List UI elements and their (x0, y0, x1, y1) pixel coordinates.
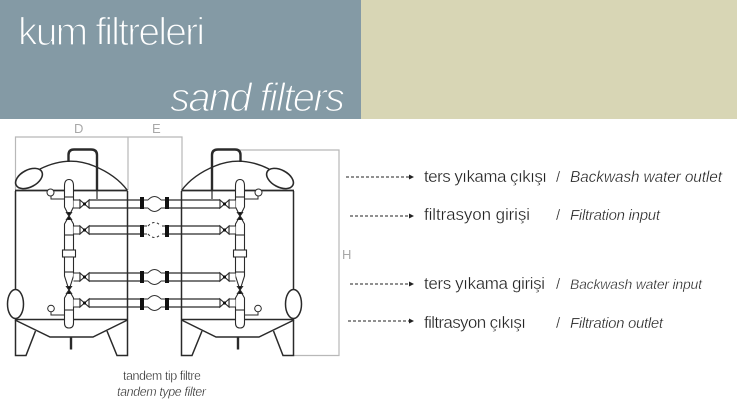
caption: tandem type filter: tandem tip filtre (123, 369, 201, 383)
callout: backwash water input: ters yıkama girişi (424, 274, 545, 293)
beige header panel (361, 0, 737, 119)
pipe couplings (148, 196, 161, 310)
subtitle: sand filters: sand filters (170, 76, 345, 120)
caption: tandem type filter (117, 369, 207, 399)
callout: filtration outlet: / (556, 315, 561, 332)
callout: filtration outlet: filtrasyon çıkışı (424, 313, 526, 332)
callout: backwash water outlet: / (556, 169, 561, 186)
dimension lines and labels (16, 121, 351, 356)
callout: backwash water outlet: Backwash water outlet (570, 169, 723, 186)
dimension lines and labels: E (152, 121, 161, 136)
callout: filtration outlet (348, 313, 664, 332)
callout: filtration outlet: Filtration outlet (570, 315, 664, 332)
diagram: left filter tank (8, 150, 148, 356)
dimension lines and labels: H (342, 247, 351, 262)
callout: backwash water input: Backwash water input (570, 276, 703, 292)
dimension lines and labels: D (74, 121, 83, 136)
diagram: right filter tank (161, 150, 302, 356)
callout: backwash water input: / (556, 276, 561, 293)
callout: filtration input: filtrasyon girişi (424, 205, 530, 224)
header panel: kum filtreleri (0, 0, 361, 120)
callout: filtration input (350, 205, 661, 224)
caption: tandem type filter: tandem type filter (117, 385, 207, 399)
callout: backwash water outlet: ters yıkama çıkışı (424, 167, 547, 186)
callout: backwash water outlet (346, 167, 723, 186)
callout: filtration input: / (556, 207, 561, 224)
callout: filtration input: Filtration input (570, 207, 661, 224)
callout: backwash water input (350, 274, 703, 293)
title: kum filtreleri: kum filtreleri (18, 11, 205, 54)
